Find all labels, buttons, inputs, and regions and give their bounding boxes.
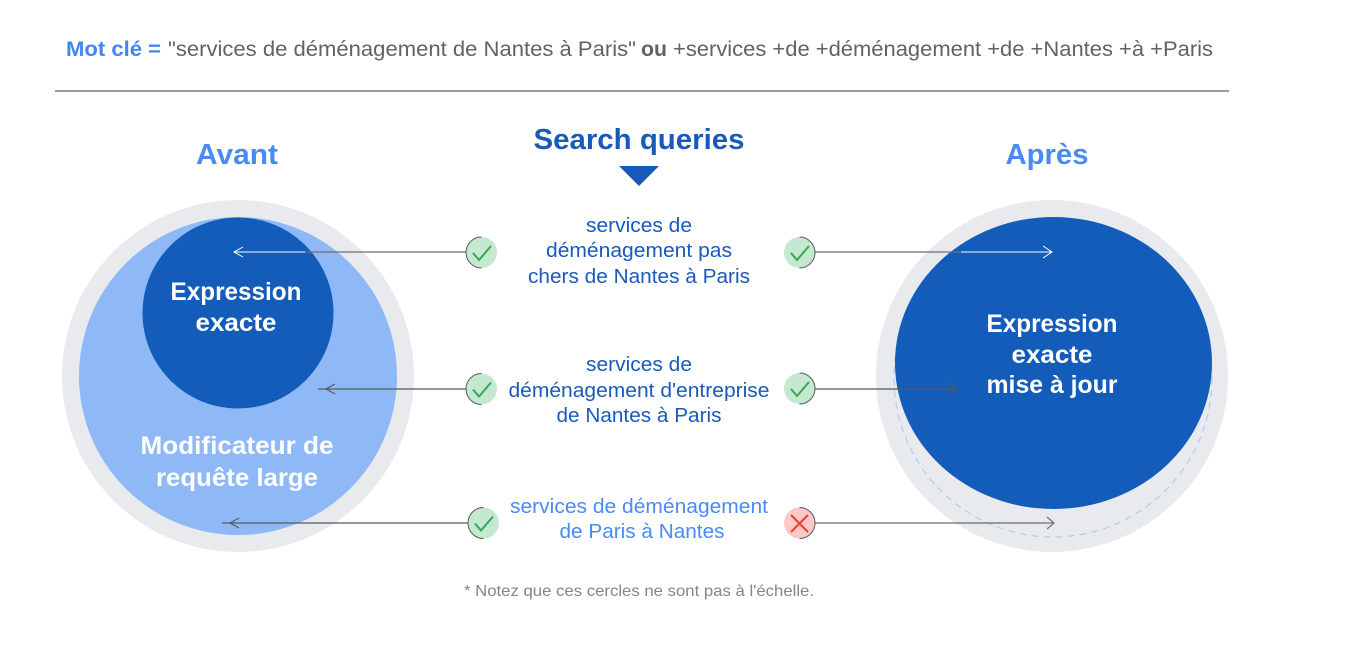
keyword line: "services de déménagement de Nantes à Paris": [168, 38, 636, 61]
keyword line: ou: [641, 38, 667, 61]
arrow: row 3 right: [815, 517, 1054, 529]
query text 2: de Nantes à Paris: [556, 405, 722, 427]
label: Expression exacte mise à jour: Expression: [986, 310, 1118, 338]
icon: check row 2 left: [466, 374, 497, 404]
icon: check row 3 left: [468, 508, 499, 538]
label: Modificateur de requête large: Modificateur de: [140, 432, 334, 460]
query text 3: services de déménagement: [510, 496, 768, 518]
left diagram: Avant circles: [62, 200, 414, 552]
label: Modificateur de requête large: requête large: [156, 464, 318, 492]
broad match modifier circle: [79, 217, 397, 535]
right diagram: Après circles: [876, 200, 1228, 552]
updated exact match ellipse: [895, 217, 1212, 509]
footnote: * Notez que ces cercles ne sont pas à l'échelle.: [464, 583, 814, 600]
label: Expression exacte mise à jour: mise à jour: [986, 371, 1118, 399]
icon: check row 1 left: [466, 237, 497, 268]
arrow: row 3 left: [222, 518, 468, 528]
query text 3: de Paris à Nantes: [560, 521, 724, 543]
keyword line: [66, 38, 1213, 61]
label: Expression exacte: Expression: [170, 278, 302, 306]
dashed previous extent: [894, 219, 1212, 537]
query text 1: services de: [586, 215, 692, 237]
query text 2: déménagement d'entreprise: [508, 380, 770, 402]
outer grey circle: [62, 200, 414, 552]
keyword line: Mot clé =: [66, 38, 161, 61]
icon: check row 1 right: [784, 237, 815, 268]
arrow: row 1 left: [234, 247, 466, 257]
arrow: row 2 left: [318, 384, 466, 394]
exact match circle: [142, 218, 334, 408]
outer grey circle: [876, 200, 1228, 552]
heading: Avant: Avant: [196, 139, 278, 171]
keyword line: +services +de +déménagement +de +Nantes +à +Paris: [673, 38, 1213, 61]
query text 1: déménagement pas: [546, 240, 732, 262]
label: Expression exacte mise à jour: exacte: [1012, 341, 1093, 369]
query text 1: chers de Nantes à Paris: [528, 266, 750, 288]
arrow: row 1 right: [815, 246, 1052, 258]
divider: [55, 90, 1229, 92]
arrow: row 2 right: [815, 383, 957, 395]
heading: Après: Après: [1006, 139, 1088, 171]
query text 2: services de: [586, 354, 692, 376]
icon: triangle pointing down: [619, 166, 659, 186]
icon: check row 2 right: [784, 373, 815, 404]
heading: Search queries: Search queries: [534, 124, 744, 156]
icon: cross row 3 right: [784, 508, 815, 538]
label: Expression exacte: exacte: [196, 309, 277, 337]
